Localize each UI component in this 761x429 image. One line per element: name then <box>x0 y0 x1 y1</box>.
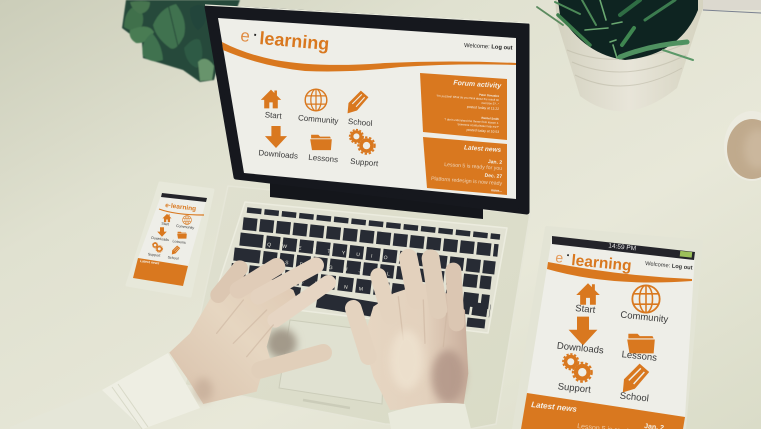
phone screen: Lessons <box>172 239 186 245</box>
icon menu <box>258 89 379 168</box>
coffee cup <box>724 111 761 181</box>
tablet screen <box>521 236 695 429</box>
icon menu: Lessons <box>308 153 338 164</box>
panel: forum activity: Forum activity <box>453 80 502 90</box>
phone screen <box>133 193 207 286</box>
icon menu: School <box>348 117 373 128</box>
panel: latest news: Dec. 27 <box>484 173 502 180</box>
laptop logo: · <box>253 27 258 42</box>
tablet screen: Lessons <box>621 349 658 364</box>
tablet latest news panel: Latest news <box>531 400 578 414</box>
tablet screen: Start <box>575 303 596 316</box>
tablet status bar: 14:59 PM <box>608 243 636 252</box>
panel: latest news: more... <box>491 188 502 193</box>
panel: forum activity: Peter Gonzalez <box>479 93 500 98</box>
trackpad <box>279 320 385 408</box>
laptop lid <box>205 5 529 219</box>
tablet screen: Support <box>557 381 592 396</box>
phone screen: e·learning <box>165 202 196 213</box>
laptop base <box>185 186 530 429</box>
right shirt cuff <box>388 403 471 429</box>
panel: latest news: Platform redesign is now ready <box>431 176 503 187</box>
keyboard: SDFGHJKL <box>285 260 401 279</box>
keyboard: QWERTYUIOP <box>267 242 414 264</box>
laptop logo: learning <box>259 28 330 54</box>
tablet screen: Community <box>620 310 669 326</box>
keyboard <box>213 202 507 333</box>
tablet screen: · <box>566 248 571 262</box>
left shirt sleeve and cuff <box>10 353 200 429</box>
tablet logo: e <box>555 249 564 266</box>
tablet latest news panel <box>521 393 685 429</box>
welcome text: Welcome: Log out <box>464 43 513 52</box>
panel: latest news: Lesson 5 is ready for you <box>444 162 502 172</box>
icon menu: Community <box>298 113 339 126</box>
phone screen: Latest news <box>140 259 160 265</box>
panel: forum activity: posted today at 11:22 <box>467 105 499 111</box>
wall edge top right <box>700 0 761 13</box>
tablet status bar <box>552 236 695 260</box>
icon menu: Start <box>264 110 283 121</box>
tablet <box>514 228 701 429</box>
icon menu: Downloads <box>258 148 298 161</box>
tablet screen: School <box>619 391 649 405</box>
panel: forum activity: Rachel Smith <box>481 116 499 121</box>
phone screen: Start <box>161 222 169 226</box>
phone screen: Support <box>148 252 161 258</box>
plant: leaves top left <box>122 0 240 82</box>
tablet screen: Welcome: Log out <box>645 261 693 272</box>
icon menu: Support <box>350 157 379 168</box>
panel: latest news: Latest news <box>464 144 502 154</box>
panel: forum activity: "I don't understand the theme from lesson 1. <box>444 117 499 125</box>
keyboard: CVBNM <box>300 279 374 294</box>
plant pot with grass top right <box>537 0 703 111</box>
phone screen: Community <box>176 224 195 230</box>
phone <box>127 183 213 296</box>
laptop logo: e <box>240 26 251 46</box>
phone screen: Downloads <box>151 236 169 242</box>
left hand <box>169 265 328 404</box>
tablet screen: Downloads <box>556 341 604 356</box>
laptop screen <box>218 18 516 199</box>
orange swoosh <box>222 42 516 72</box>
panel: forum activity: exercise 5?..." <box>481 101 499 106</box>
panel: forum activity: Someone could please help me?" <box>457 122 499 129</box>
panel: forum activity: "I'm puzzled! What do you think about the result on <box>436 94 500 102</box>
phone screen: School <box>167 255 179 261</box>
panel: latest news: Jan. 2 <box>488 159 502 166</box>
panel: forum activity <box>420 73 507 140</box>
right hand <box>353 258 468 410</box>
panel: forum activity: posted today at 10:53 <box>466 128 499 134</box>
panel: latest news <box>423 137 507 195</box>
tablet screen: learning <box>571 252 632 275</box>
